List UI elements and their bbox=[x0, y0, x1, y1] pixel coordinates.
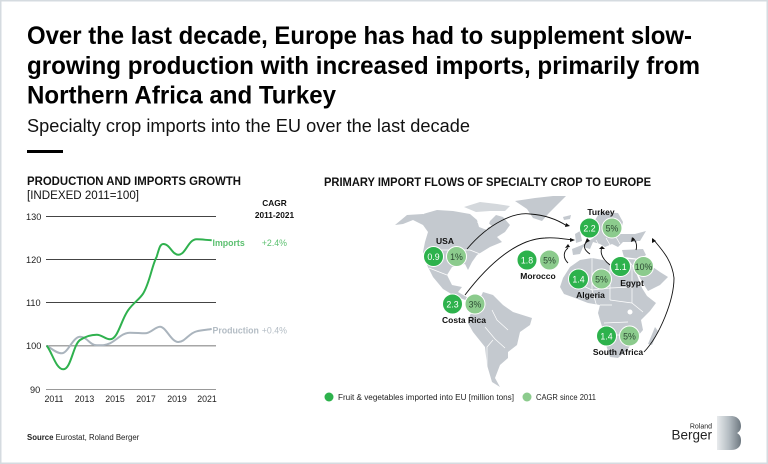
y axis labels: 100 bbox=[26, 341, 41, 351]
bubbles: Turkey: 5% bbox=[606, 224, 619, 234]
legend: CAGR since 2011 bbox=[536, 393, 597, 402]
x axis labels: 2019 bbox=[167, 394, 187, 404]
chart heading bbox=[27, 176, 241, 202]
logo: Roland Berger: Roland bbox=[690, 424, 712, 430]
Scandinavia and Russia bbox=[592, 212, 646, 241]
bubbles: Morocco: 5% bbox=[543, 256, 556, 266]
bubbles: Morocco bbox=[517, 250, 560, 281]
bubbles: USA: 1% bbox=[450, 252, 463, 262]
logo: Roland Berger: Berger bbox=[671, 428, 712, 442]
bubbles: South Africa: 1.4 bbox=[600, 332, 613, 342]
accent bar bbox=[27, 150, 63, 153]
subtitle: Specialty crop imports into the EU over the last decade bbox=[27, 115, 470, 136]
x axis labels: 2015 bbox=[105, 394, 125, 404]
series labels: +2.4% bbox=[262, 238, 287, 248]
imports line bbox=[47, 239, 212, 369]
bubbles: Egypt: Egypt bbox=[620, 278, 644, 288]
CAGR header: CAGR bbox=[262, 198, 287, 208]
bubbles: Costa Rica bbox=[442, 294, 486, 325]
title bbox=[27, 22, 700, 110]
chart heading: [INDEXED 2011=100] bbox=[27, 190, 139, 202]
y axis labels: 90 bbox=[30, 385, 40, 395]
bubbles: Egypt: 10% bbox=[635, 262, 652, 272]
bubbles: Algeria: 1.4 bbox=[572, 274, 585, 284]
Madagascar bbox=[648, 327, 658, 345]
series labels: Production bbox=[212, 326, 259, 336]
world map bbox=[395, 196, 668, 387]
Hudson Bay and Lake Victoria bbox=[477, 221, 632, 314]
bubbles: Egypt: 1.1 bbox=[614, 262, 627, 272]
line chart bbox=[26, 198, 294, 404]
bubbles: Turkey: Turkey bbox=[587, 207, 615, 217]
logo: Roland Berger bbox=[671, 416, 741, 450]
series labels: +0.4% bbox=[262, 326, 287, 336]
bubbles: Algeria: 5% bbox=[595, 274, 608, 284]
Europe bbox=[572, 235, 637, 255]
bubbles: Costa Rica: Costa Rica bbox=[442, 315, 486, 325]
Arctic islands bbox=[464, 202, 510, 212]
x axis labels: 2011 bbox=[45, 394, 64, 404]
CAGR header bbox=[255, 198, 294, 220]
bubbles: USA: USA bbox=[436, 236, 454, 246]
Greenland bbox=[515, 196, 566, 221]
map heading: PRIMARY IMPORT FLOWS OF SPECIALTY CROP TO EUROPE bbox=[324, 177, 651, 189]
series labels: Imports bbox=[212, 238, 245, 248]
bubbles: Algeria: Algeria bbox=[576, 290, 605, 300]
UK bbox=[575, 231, 582, 243]
country borders bbox=[423, 204, 643, 367]
North America bbox=[395, 210, 510, 300]
bubbles: USA bbox=[424, 236, 466, 266]
legend: Fruit & vegetables imported into EU [million tons] bbox=[338, 393, 514, 402]
bubbles: South Africa: 5% bbox=[623, 332, 636, 342]
source: Source Eurostat, Roland Berger bbox=[27, 433, 140, 442]
x axis labels: 2017 bbox=[136, 394, 156, 404]
Arabia bbox=[628, 259, 668, 291]
y axis labels: 110 bbox=[26, 298, 41, 308]
production line bbox=[47, 327, 212, 353]
legend bbox=[324, 392, 597, 402]
x axis labels: 2021 bbox=[197, 394, 217, 404]
title: Northern Africa and Turkey bbox=[27, 82, 336, 110]
South America bbox=[468, 292, 532, 387]
x axis labels: 2013 bbox=[75, 394, 94, 404]
flow arrows bbox=[465, 214, 674, 352]
series labels bbox=[212, 238, 287, 336]
bubbles: South Africa: South Africa bbox=[593, 347, 643, 357]
chart heading: PRODUCTION AND IMPORTS GROWTH bbox=[27, 176, 241, 188]
gridlines bbox=[46, 216, 216, 390]
arrowheads bbox=[565, 223, 656, 249]
title: growing production with increased imports, primarily from bbox=[27, 52, 700, 80]
title: Over the last decade, Europe has had to supplement slow- bbox=[27, 22, 692, 50]
bubbles: Egypt bbox=[610, 256, 654, 288]
y axis labels bbox=[26, 212, 41, 395]
y axis labels: 130 bbox=[26, 212, 41, 222]
bubbles: Algeria bbox=[568, 269, 612, 300]
bubbles: Turkey: 2.2 bbox=[583, 224, 596, 234]
bubbles: Turkey bbox=[580, 207, 622, 238]
bubbles: Morocco: 1.8 bbox=[521, 256, 533, 266]
x axis labels bbox=[45, 394, 217, 404]
CAGR header: 2011-2021 bbox=[255, 210, 294, 220]
y axis labels: 120 bbox=[26, 255, 41, 265]
Turkey and Iran bbox=[622, 249, 646, 259]
Africa bbox=[560, 258, 656, 358]
bubbles: USA: 0.9 bbox=[427, 252, 440, 262]
Iceland bbox=[563, 215, 571, 220]
bubbles: South Africa bbox=[593, 326, 643, 357]
bubbles: Costa Rica: 3% bbox=[469, 300, 482, 310]
bubbles: Costa Rica: 2.3 bbox=[446, 300, 459, 310]
bubbles: Morocco: Morocco bbox=[520, 271, 556, 281]
